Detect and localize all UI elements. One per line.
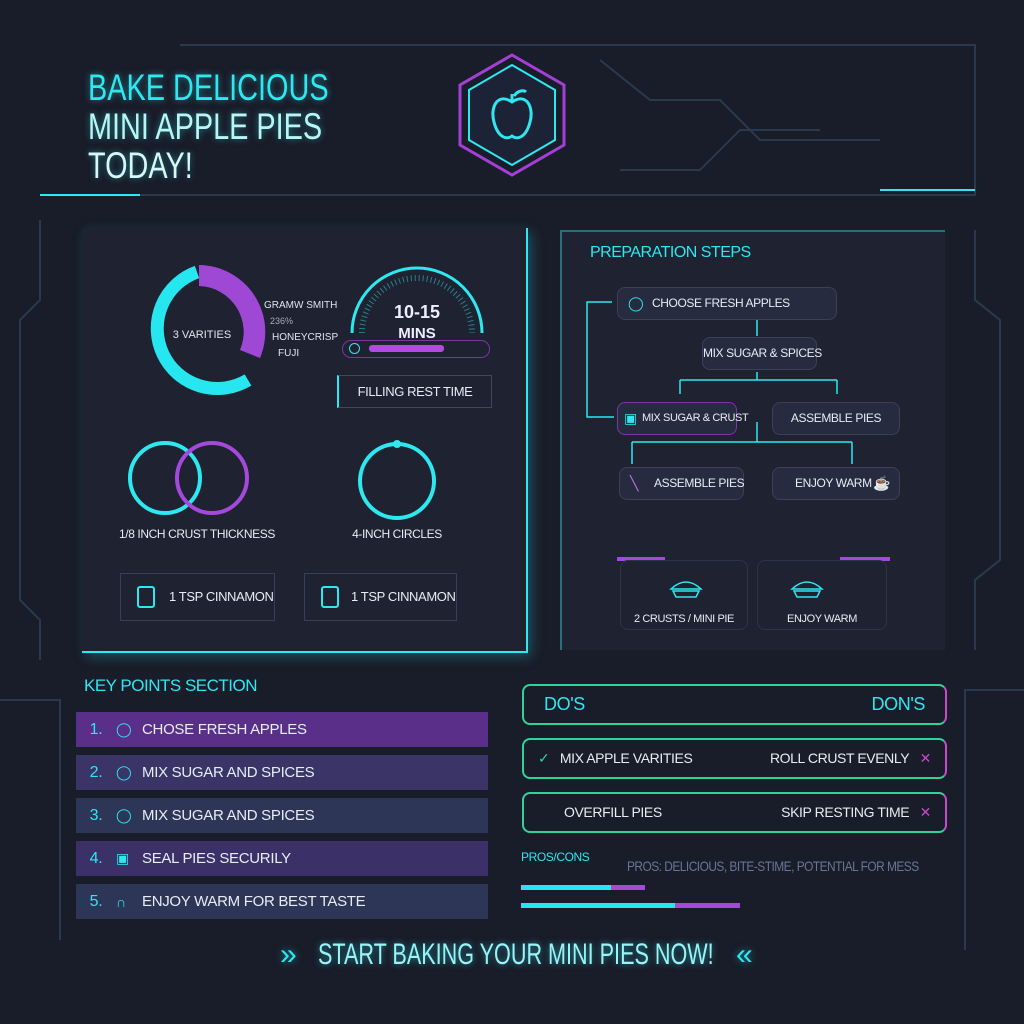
- key points list: 5.: [90, 892, 102, 910]
- dos and donts: SKIP RESTING TIME ✕: [781, 804, 931, 820]
- key points list: 1.: [90, 720, 102, 738]
- key points list: SEAL PIES SECURILY: [142, 850, 291, 867]
- panel: preparation steps: ▣: [624, 410, 637, 426]
- key points list: ∩: [116, 894, 126, 910]
- panel: preparation steps: [560, 230, 945, 650]
- gauge: filling rest time: MINS: [398, 325, 436, 342]
- panel: stats: 1 TSP CINNAMON: [351, 589, 455, 604]
- panel: preparation steps: ☕: [873, 475, 890, 491]
- dos and donts: ✓ MIX APPLE VARITIES: [538, 750, 692, 766]
- call to action: «: [736, 938, 753, 971]
- key points list: ▣: [116, 850, 129, 866]
- flow nodes: [617, 287, 837, 320]
- pros/cons: PROS/CONS: [521, 850, 589, 864]
- call to action: START BAKING YOUR MINI PIES NOW!: [318, 938, 714, 971]
- key points list: [76, 712, 488, 919]
- pie cards: [620, 560, 748, 630]
- gauge: filling rest time: [337, 266, 492, 408]
- dos and donts: [522, 684, 947, 833]
- gauge: filling rest time: FILLING REST TIME: [358, 384, 472, 399]
- icon: apple hexagon: [458, 53, 566, 177]
- title: MINI APPLE PIES: [88, 106, 322, 147]
- pie cards: 2 CRUSTS / MINI PIE: [634, 613, 734, 625]
- gauge: filling rest time: 10-15: [394, 302, 440, 322]
- panel: preparation steps: ASSEMBLE PIES: [654, 476, 744, 490]
- panel: preparation steps: ╲: [630, 475, 638, 491]
- panel: preparation steps: MIX SUGAR & SPICES: [703, 346, 822, 360]
- dos and donts: OVERFILL PIES: [564, 804, 662, 820]
- title: [86, 67, 331, 186]
- cinnamon boxes: 1 TSP CINNAMON: [169, 589, 273, 604]
- donut chart: HONEYCRISP: [272, 332, 338, 343]
- key points list: 4.: [90, 850, 102, 866]
- donut chart: 3 VARITIES: [173, 329, 231, 341]
- key points list: ◯: [116, 807, 131, 823]
- heading: key points: KEY POINTS SECTION: [84, 676, 257, 695]
- panel: stats: [82, 228, 528, 653]
- key points list: MIX SUGAR AND SPICES: [142, 764, 314, 781]
- panel: preparation steps: ENJOY WARM: [787, 613, 857, 625]
- panel: preparation steps: PREPARATION STEPS: [590, 244, 751, 261]
- panel: preparation steps: ASSEMBLE PIES: [791, 411, 881, 425]
- key points list: 3.: [90, 806, 102, 824]
- flow nodes: ◯: [628, 295, 643, 311]
- key points list: CHOSE FRESH APPLES: [142, 721, 307, 738]
- key points list: ENJOY WARM FOR BEST TASTE: [142, 893, 365, 910]
- pros/cons: PROS: DELICIOUS, BITE-STIME, POTENTIAL FOR MESS: [627, 858, 919, 874]
- flow nodes: CHOOSE FRESH APPLES: [652, 296, 790, 310]
- donut chart: [150, 265, 338, 395]
- panel: preparation steps: ENJOY WARM: [795, 476, 872, 490]
- key points list: ◯: [116, 764, 131, 780]
- title: TODAY!: [88, 145, 193, 186]
- dos and donts: ROLL CRUST EVENLY ✕: [770, 750, 931, 766]
- key points list: MIX SUGAR AND SPICES: [142, 807, 314, 824]
- panel: preparation steps: MIX SUGAR & CRUST: [642, 412, 748, 424]
- pros/cons: [521, 850, 919, 908]
- circle: 4-inch: [358, 440, 436, 520]
- key points list: ◯: [116, 721, 131, 737]
- donut chart: 236%: [270, 316, 293, 326]
- cinnamon boxes: [120, 573, 275, 621]
- panel: stats: 1/8 INCH CRUST THICKNESS: [119, 527, 275, 541]
- donut chart: GRAMW SMITH: [264, 300, 337, 311]
- dos and donts: DO'S: [544, 694, 585, 714]
- dos and donts: DON'S: [872, 694, 925, 714]
- key points list: 2.: [90, 764, 102, 780]
- donut chart: FUJI: [278, 348, 299, 359]
- title: BAKE DELICIOUS: [88, 67, 329, 108]
- venn: crust thickness: [128, 441, 249, 515]
- call to action: »: [280, 938, 297, 971]
- panel: stats: 4-INCH CIRCLES: [352, 527, 442, 541]
